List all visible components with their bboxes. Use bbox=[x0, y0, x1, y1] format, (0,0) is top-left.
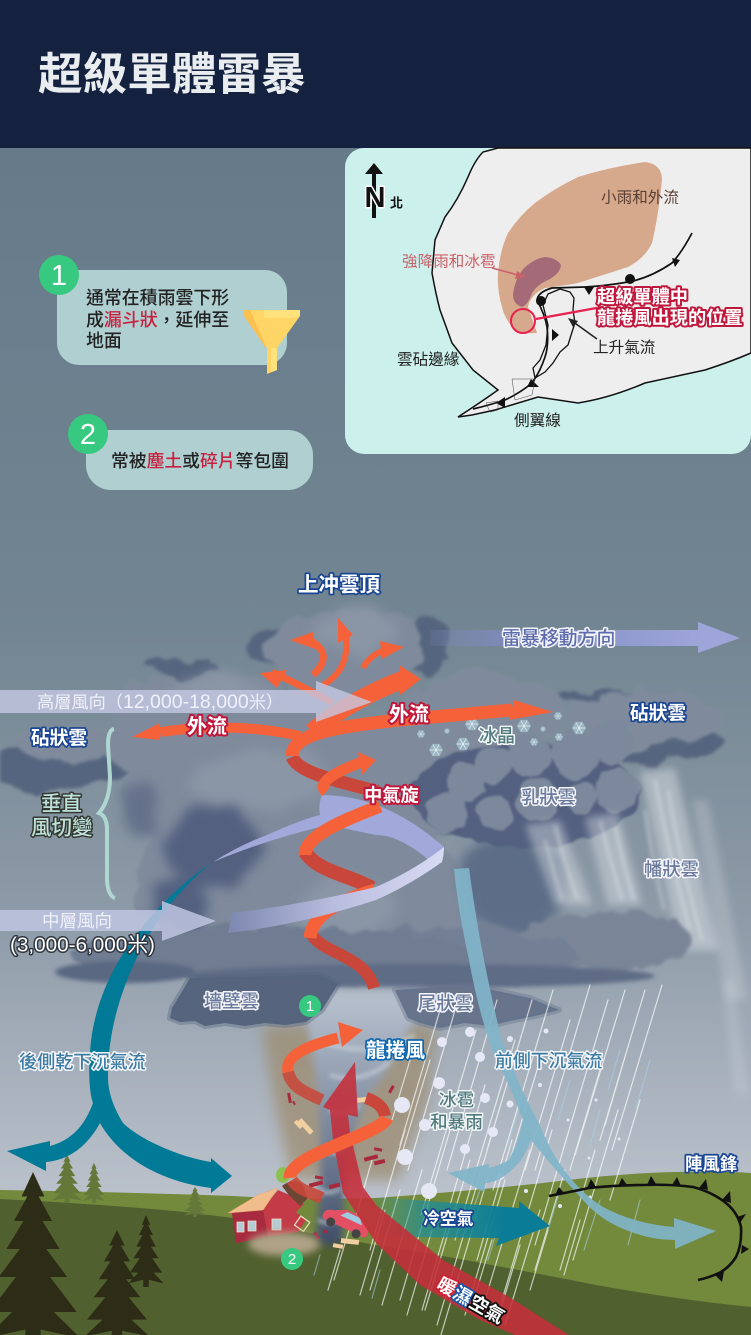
wall cloud bbox=[170, 975, 338, 1026]
map labels: 強降雨和冰雹 bbox=[402, 252, 496, 270]
title: 超級單體雷暴 bbox=[38, 50, 306, 100]
gust front bbox=[549, 1176, 749, 1282]
high-level wind label: 高層風向（12,000-18,000米） bbox=[37, 691, 283, 713]
overshooting top label: 上冲雲頂 bbox=[298, 574, 380, 596]
hail and rain: 冰雹 bbox=[439, 1090, 474, 1110]
north arrow: 北 bbox=[390, 196, 403, 210]
map labels: 雲砧邊緣 bbox=[397, 350, 460, 368]
cloud body bbox=[12, 608, 723, 983]
mid-level wind arrow bbox=[0, 901, 216, 941]
warm moist air arrow bbox=[323, 1062, 569, 1335]
arrow to hail core bbox=[492, 268, 518, 275]
mid-level wind label: 中層風向 bbox=[42, 911, 112, 931]
north arrow bbox=[365, 163, 403, 218]
light pine trees bbox=[52, 1155, 206, 1217]
gust front and flanking line bbox=[473, 233, 692, 412]
map labels bbox=[397, 188, 743, 430]
arrow to updraft bbox=[572, 321, 597, 339]
mid-level wind ribbon, front part bbox=[228, 847, 444, 933]
updraft region bbox=[533, 289, 575, 378]
storm motion label: 雷暴移動方向 bbox=[502, 626, 615, 650]
vertical shear: 垂直 bbox=[41, 792, 82, 816]
light rain and outflow area bbox=[498, 162, 662, 333]
dark cloud core bbox=[122, 788, 565, 935]
mammatus: 乳狀雲 bbox=[521, 786, 576, 808]
tornado funnel bbox=[300, 990, 425, 1245]
callout 2 text: 常被塵土或碎片等包圍 bbox=[111, 451, 289, 471]
tree behind house bbox=[276, 1167, 290, 1183]
marker 1 bbox=[299, 995, 321, 1017]
mammatus puffs bbox=[426, 720, 639, 833]
panel: overhead map of supercell bbox=[345, 148, 751, 454]
heavy rain and hail core bbox=[513, 257, 561, 307]
callout 1: funnel shape: 地面 bbox=[86, 331, 122, 351]
outflow left: 外流 bbox=[187, 715, 227, 738]
ground: hills bbox=[0, 1172, 751, 1335]
rear-flank downdraft arrow bbox=[7, 862, 232, 1193]
badge 2: 2 bbox=[80, 419, 96, 451]
map labels: 小雨和外流 bbox=[601, 188, 679, 206]
storm motion arrow bbox=[430, 622, 740, 653]
icon: funnel bbox=[244, 310, 300, 374]
brace for vertical wind shear bbox=[99, 729, 115, 898]
hail and rain: 和暴雨 bbox=[430, 1112, 483, 1132]
marker 1: 1 bbox=[306, 998, 314, 1015]
map labels: 側翼線 bbox=[514, 412, 561, 430]
soft highlight puffs bbox=[170, 610, 395, 940]
forward-flank downdraft arrow bbox=[448, 868, 716, 1249]
forward-flank label: 前側下沉氣流 bbox=[495, 1051, 602, 1071]
anvil label right: 砧狀雲 bbox=[630, 702, 686, 724]
callout 1: funnel shape bbox=[39, 255, 300, 374]
callout line bbox=[536, 307, 602, 319]
badge 2 bbox=[68, 414, 108, 454]
dust cloud at ground bbox=[248, 1232, 320, 1256]
anvil label left: 砧狀雲 bbox=[31, 728, 87, 748]
orange updraft spiral bbox=[132, 618, 553, 1198]
warm moist air: 暖濕空氣 bbox=[434, 1272, 508, 1328]
outflow right: 外流 bbox=[389, 703, 429, 726]
cold air arrow bbox=[376, 1197, 550, 1246]
front ribbons bbox=[160, 635, 512, 1178]
tail cloud label: 尾狀雲 bbox=[418, 992, 473, 1014]
rain bbox=[314, 985, 662, 1335]
callout 2: debris bbox=[68, 414, 313, 490]
callout 1 text: 通常在積雨雲下形 bbox=[86, 288, 229, 308]
ice crystals: 冰晶 bbox=[479, 726, 515, 746]
high-level wind arrow bbox=[0, 681, 372, 722]
map labels: 超級單體中 bbox=[597, 286, 688, 307]
dust envelope around tornado bbox=[262, 1025, 436, 1180]
callout 1: funnel shape: 成漏斗狀，延伸至 bbox=[86, 307, 229, 333]
vertical shear bbox=[31, 792, 92, 840]
cold air: 冷空氣 bbox=[423, 1208, 474, 1228]
dark cloud base band bbox=[55, 961, 655, 988]
dark shadows behind cloud bbox=[0, 618, 732, 790]
icon: flying car bbox=[319, 1201, 373, 1242]
marker 2: 2 bbox=[288, 1251, 296, 1268]
windows bbox=[237, 1219, 281, 1232]
snow crystals bbox=[417, 712, 586, 756]
mid-level wind ribbon, back part bbox=[213, 795, 444, 862]
broken window frame bbox=[294, 1216, 310, 1231]
house bbox=[228, 1167, 310, 1243]
map labels: 龍捲風出現的位置 bbox=[597, 307, 743, 328]
arrowheads bbox=[132, 618, 553, 1047]
back ribbons bbox=[288, 757, 385, 1198]
debris bbox=[287, 1085, 395, 1249]
dark pine trees bbox=[0, 1172, 163, 1335]
marker 2 bbox=[281, 1248, 303, 1270]
hail and rain bbox=[430, 1090, 483, 1132]
mesocyclone: 中氣旋 bbox=[364, 784, 419, 806]
rear-flank label: 後側乾下沉氣流 bbox=[19, 1052, 146, 1072]
hail stones bbox=[394, 1027, 620, 1208]
cloud base bbox=[65, 912, 693, 982]
badge 1: 1 bbox=[51, 260, 67, 292]
gust front label: 陣風鋒 bbox=[685, 1154, 738, 1174]
wall cloud label: 墻壁雲 bbox=[204, 990, 259, 1012]
anvil outline bbox=[432, 148, 751, 417]
tornado label: 龍捲風 bbox=[366, 1040, 425, 1062]
vertical shear: 風切變 bbox=[31, 816, 92, 840]
header band bbox=[0, 0, 751, 148]
north arrow: N bbox=[365, 182, 385, 214]
dark belly under mammatus bbox=[410, 743, 640, 847]
tail cloud bbox=[395, 985, 559, 1028]
mid-level altitude: (3,000-6,000米) bbox=[10, 934, 155, 956]
badge 1 bbox=[39, 255, 79, 295]
virga streaks bbox=[525, 768, 748, 1095]
map labels: 上升氣流 bbox=[593, 338, 655, 356]
supercell cloud mass bbox=[0, 608, 748, 1095]
diagram labels bbox=[10, 574, 738, 1328]
tornado location circle bbox=[511, 309, 535, 333]
virga: 幡狀雲 bbox=[644, 858, 699, 880]
